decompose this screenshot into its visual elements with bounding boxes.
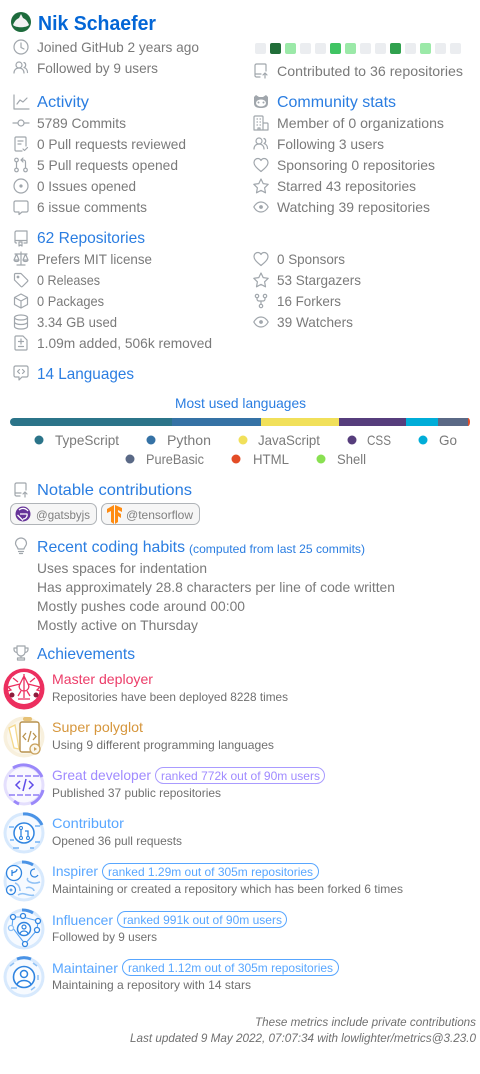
icon: tag — [14, 274, 28, 287]
achievement: contributor — [4, 812, 182, 854]
organizations: Member of 0 organizations — [277, 115, 444, 131]
header: profile — [11, 12, 199, 76]
icon: commit — [13, 120, 29, 126]
icon: database — [14, 315, 28, 329]
chip: tensorflow: @tensorflow — [126, 508, 193, 522]
repositories heading: 62 Repositories — [37, 230, 145, 247]
achievement: influencer: Followed by 9 users — [52, 930, 157, 944]
legend: PureBasic — [146, 451, 204, 467]
achievement: great developer: Published 37 public repositories — [52, 786, 221, 800]
legend: Go — [439, 432, 457, 448]
releases: 0 Releases — [37, 272, 100, 288]
legend: TypeScript — [55, 432, 119, 448]
issues opened: 0 Issues opened — [37, 178, 136, 194]
achievement: master deployer: Repositories have been deployed 8228 times — [52, 690, 288, 704]
panel: languages — [10, 366, 470, 467]
achievement: master deployer — [4, 668, 288, 710]
footer note: These metrics include private contributions — [255, 1015, 476, 1029]
icon: octoface — [254, 95, 268, 108]
panel: achievements — [4, 646, 403, 998]
icon: eye — [254, 202, 268, 212]
icon: issue — [14, 179, 28, 193]
achievement: maintainer: Maintaining a repository with 14 stars — [52, 978, 251, 992]
rank pill: ranked 991k out of 90m users — [123, 913, 282, 927]
name: Nik Schaefer — [38, 13, 156, 35]
achievement: contributor: Opened 36 pull requests — [52, 834, 182, 848]
packages: 0 Packages — [37, 293, 104, 309]
activity heading: Activity — [37, 94, 89, 111]
icon: people — [254, 138, 268, 149]
contributed repositories — [255, 63, 463, 79]
rank pill: ranked 1.29m out of 305m repositories — [108, 865, 313, 879]
legend — [34, 432, 457, 467]
achievement: inspirer: Maintaining or created a repository which has been forked 6 times — [52, 882, 403, 896]
chip: tensorflow — [102, 504, 200, 524]
sponsoring: Sponsoring 0 repositories — [277, 157, 435, 173]
icon: people — [14, 62, 28, 73]
achievement: maintainer — [4, 956, 338, 998]
avatar — [11, 12, 31, 32]
icon: organization — [254, 116, 268, 130]
icon: star — [254, 273, 268, 287]
legend: Shell — [337, 451, 366, 467]
chip: gatsbyjs — [10, 504, 96, 524]
panel: activity — [13, 94, 186, 215]
achievement: contributor: Contributor — [52, 815, 124, 831]
achievement: great developer — [4, 764, 324, 806]
habit: active day: Mostly active on Thursday — [37, 617, 198, 633]
contribution calendar — [255, 43, 461, 54]
lines changed: 1.09m added, 506k removed — [37, 335, 212, 351]
languages heading: 14 Languages — [37, 366, 134, 383]
icon: graph — [14, 95, 29, 109]
legend: JavaScript — [258, 432, 320, 448]
icon: repo — [15, 231, 27, 246]
panel: recent coding habits — [16, 538, 395, 633]
watchers: 39 Watchers — [277, 314, 353, 330]
footer — [130, 1015, 476, 1045]
panel: notable contributions — [10, 482, 200, 524]
icon: diff — [15, 336, 27, 350]
storage used: 3.34 GB used — [37, 314, 117, 330]
icon: heart — [254, 158, 268, 172]
achievement: super polyglot: Super polyglot — [52, 719, 143, 735]
achievement: super polyglot — [4, 716, 274, 758]
license: Prefers MIT license — [37, 251, 152, 267]
commits: 5789 Commits — [37, 115, 126, 131]
forkers: 16 Forkers — [277, 293, 341, 309]
achievement: master deployer: Master deployer — [52, 671, 153, 687]
stargazers: 53 Stargazers — [277, 272, 361, 288]
icon: package — [14, 294, 28, 308]
watching: Watching 39 repositories — [277, 199, 430, 215]
icon: fork — [255, 294, 267, 308]
panel: community stats — [254, 94, 444, 215]
achievement: inspirer: Inspirer — [52, 863, 98, 879]
habits heading: Recent coding habits — [37, 539, 185, 556]
icon: heart — [254, 252, 268, 266]
community heading: Community stats — [277, 94, 396, 111]
achievement: influencer: Influencer — [52, 912, 113, 928]
icon: star — [254, 179, 268, 193]
habits note: (computed from last 25 commits) — [189, 542, 365, 556]
achievement: super polyglot: Using 9 different programming languages — [52, 738, 274, 752]
starred: Starred 43 repositories — [277, 178, 416, 194]
icon: repo push — [255, 64, 267, 78]
pull requests reviewed: 0 Pull requests reviewed — [37, 136, 186, 152]
rank pill: ranked 1.12m out of 305m repositories — [128, 961, 333, 975]
icon: pull request — [15, 158, 27, 172]
icon: law — [14, 252, 28, 265]
legend: CSS — [367, 432, 391, 448]
achievements heading: Achievements — [37, 646, 135, 663]
joined text: Joined GitHub 2 years ago — [37, 39, 199, 55]
achievement: inspirer — [4, 860, 403, 902]
icon: code review — [15, 137, 28, 151]
rank pill: ranked 772k out of 90m users — [161, 769, 320, 783]
panel: repositories — [14, 230, 361, 351]
chip: gatsbyjs: @gatsbyjs — [36, 508, 90, 522]
pull requests opened: 5 Pull requests opened — [37, 157, 178, 173]
following: Following 3 users — [277, 136, 384, 152]
notable heading: Notable contributions — [37, 482, 192, 499]
followers text: Followed by 9 users — [37, 60, 158, 76]
chart caption: Most used languages — [175, 395, 306, 411]
habit: indentation: Uses spaces for indentation — [37, 560, 207, 576]
achievement: great developer: Great developer — [52, 767, 151, 783]
legend: Python — [167, 432, 211, 448]
icon: repo push — [15, 483, 27, 497]
habit: push time: Mostly pushes code around 00:00 — [37, 598, 245, 614]
last updated: Last updated 9 May 2022, 07:07:34 with lowlighter/metrics@3.23.0 — [130, 1031, 476, 1045]
achievement: influencer — [4, 908, 286, 950]
achievement: maintainer: Maintainer — [52, 960, 118, 976]
icon: light bulb — [16, 538, 26, 554]
contributed text: Contributed to 36 repositories — [277, 63, 463, 79]
stacked bar chart — [10, 418, 470, 426]
icon: trophy — [14, 646, 28, 660]
icon: comment — [14, 201, 28, 214]
icon: clock — [14, 40, 28, 54]
icon: code square — [14, 366, 28, 380]
icon: eye — [254, 317, 268, 327]
issue comments: 6 issue comments — [37, 199, 147, 215]
sponsors: 0 Sponsors — [277, 251, 345, 267]
legend: HTML — [253, 451, 289, 467]
habit: line length: Has approximately 28.8 characters per line of code written — [37, 579, 395, 595]
